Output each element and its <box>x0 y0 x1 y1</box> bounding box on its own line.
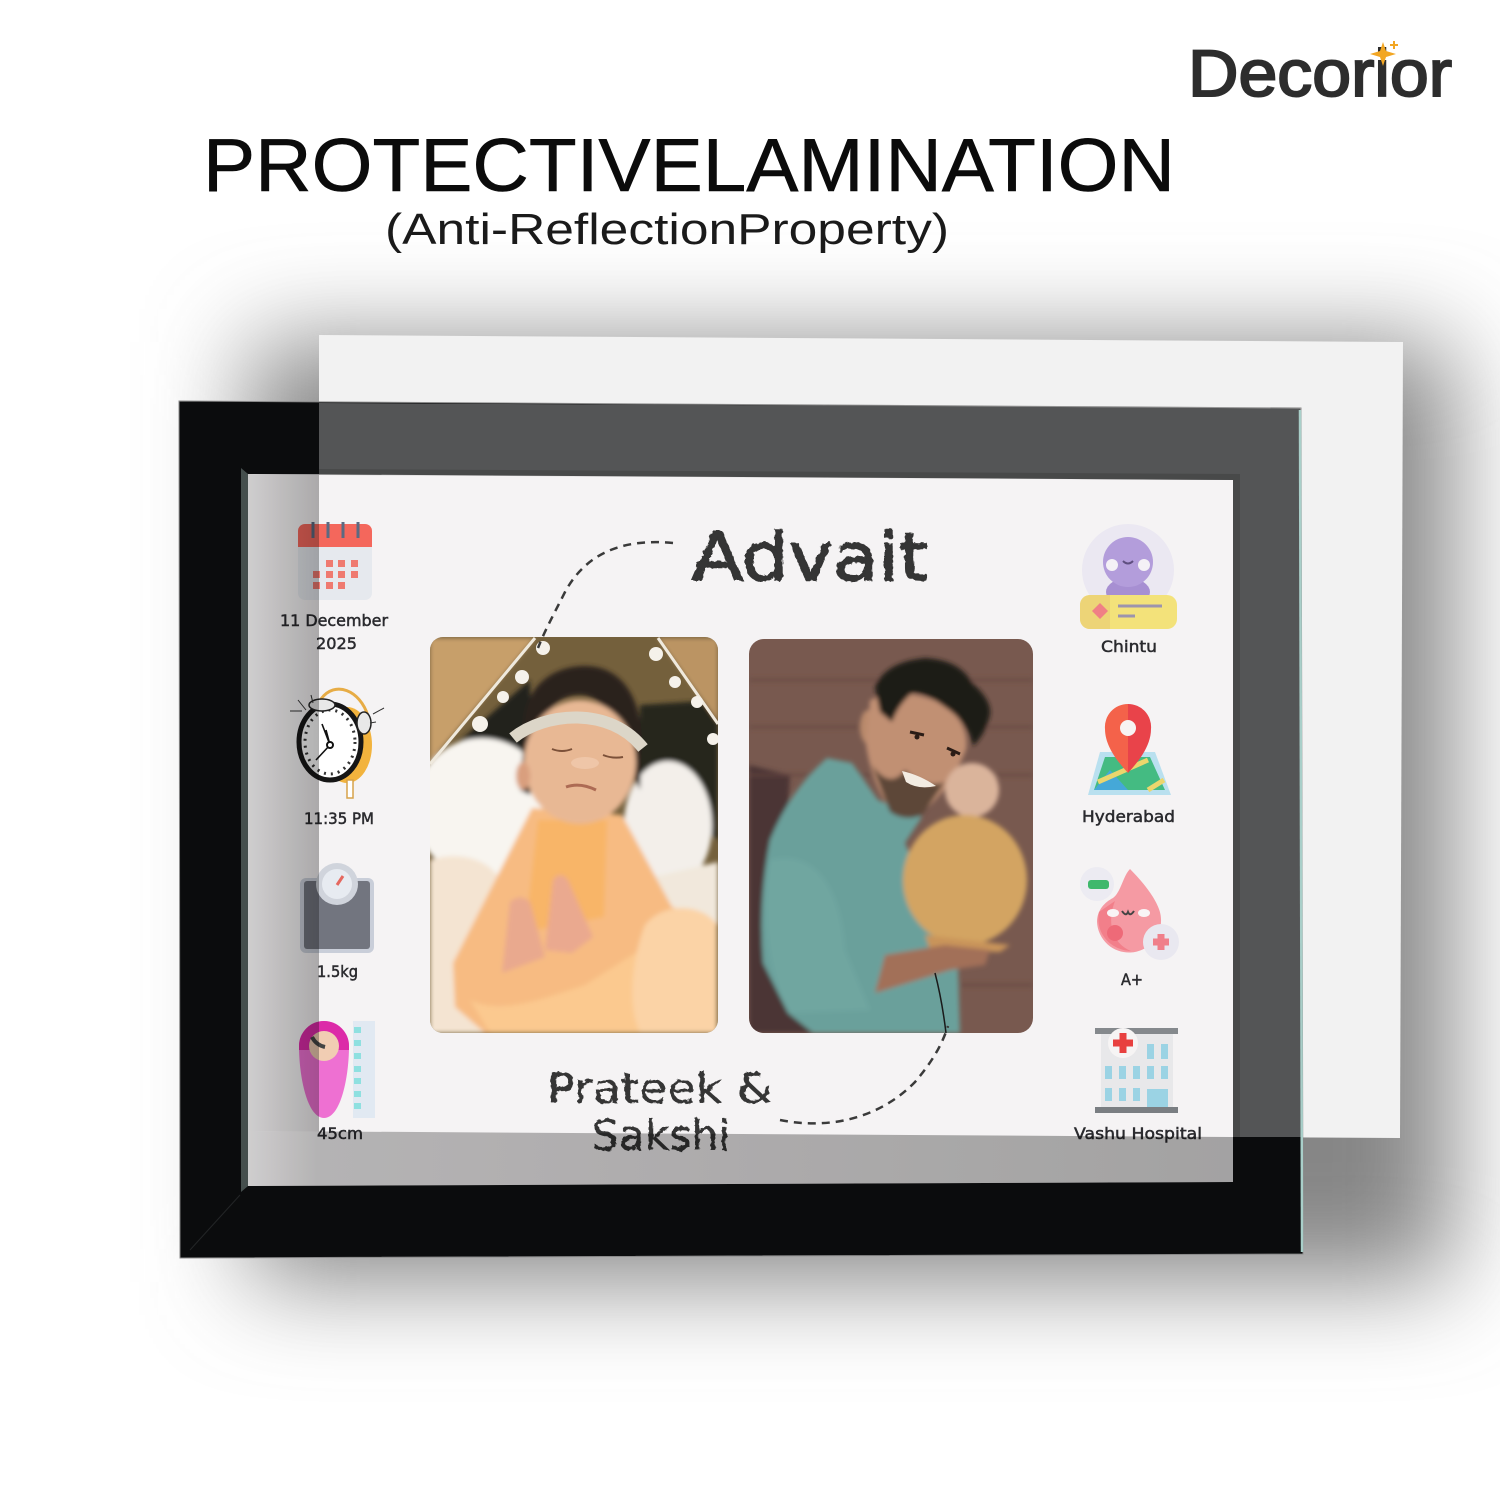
label: weight: 1.5kg <box>317 962 358 981</box>
photo: father holding baby <box>749 639 1033 1033</box>
dashed connector: name to baby photo <box>538 542 673 648</box>
icon: hospital <box>1095 1028 1178 1113</box>
parents names: Prateek & <box>547 1064 773 1113</box>
baby name: Advait <box>692 519 928 596</box>
icon: name tag character <box>1080 524 1177 629</box>
photo: baby <box>414 637 719 1033</box>
label: length: 45cm <box>317 1124 363 1143</box>
laminate sheet <box>319 335 1403 1138</box>
icon: alarm clock <box>290 689 384 798</box>
title: PROTECTIVELAMINATION <box>203 123 1175 207</box>
label: date: 11 December <box>280 611 388 630</box>
frame outer edge highlight <box>1300 410 1302 1252</box>
label: time: 11:35 PM <box>304 809 374 828</box>
label: date <box>280 611 388 653</box>
label: hospital name: Vashu Hospital <box>1074 1124 1202 1143</box>
laminate overlay on frame <box>319 403 1302 1137</box>
drop shadow <box>250 342 1452 1282</box>
icon: weighing scale <box>300 863 374 953</box>
frame inner shade under laminate <box>319 469 1240 1137</box>
mat board <box>248 474 1233 1186</box>
dashed connector: parents to father photo <box>780 1026 948 1123</box>
picture frame <box>179 401 1303 1258</box>
icon: sparkle <box>1370 41 1398 66</box>
label: date: 2025 <box>316 634 357 653</box>
subtitle: (Anti-ReflectionProperty) <box>385 205 949 254</box>
parents names <box>547 1064 773 1160</box>
logo: Decorior <box>1188 36 1452 110</box>
label: nickname: Chintu <box>1101 637 1157 656</box>
label: blood group: A+ <box>1121 970 1143 989</box>
unlaminated mat area tint <box>248 474 1233 1186</box>
icon: swaddled baby with ruler <box>299 1021 375 1118</box>
icon: blood drop <box>1080 867 1179 960</box>
icon: map pin <box>1088 704 1171 795</box>
parents names: Sakshi <box>592 1111 730 1160</box>
label: city: Hyderabad <box>1082 807 1175 826</box>
icon: calendar <box>298 522 372 600</box>
